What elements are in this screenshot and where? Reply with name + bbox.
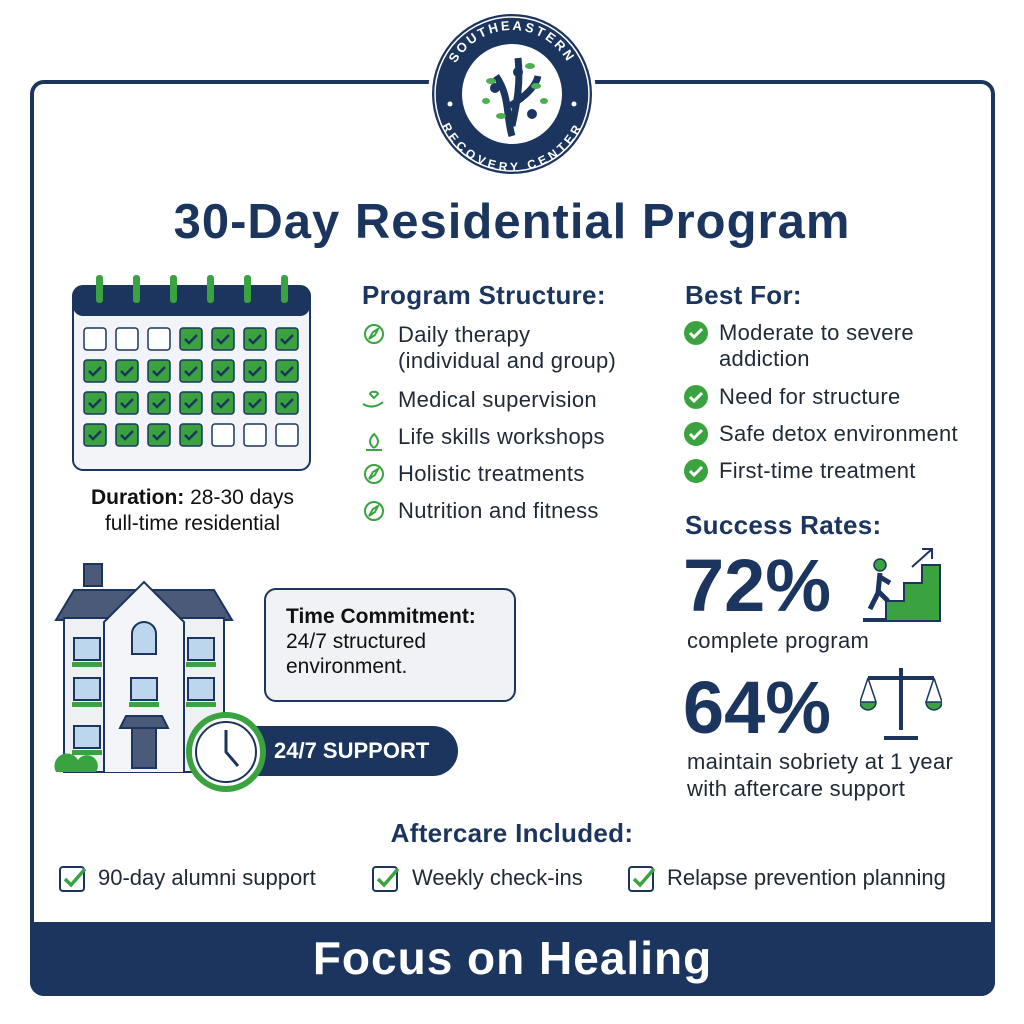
panel: best for [684, 280, 958, 483]
icon: scales [860, 668, 942, 740]
aftercare items: 90-day alumni support [98, 865, 316, 890]
icon: clock [186, 712, 266, 792]
panel: program structure [362, 280, 616, 523]
panel: best for: Need for structure [719, 384, 900, 409]
panel: best for: First-time treatment [719, 458, 916, 483]
callout: time commitment: 24/7 structured [286, 630, 426, 653]
panel: program structure: (individual and group) [398, 348, 616, 373]
panel: success rates: with aftercare support [687, 776, 905, 801]
panel: program structure: Medical supervision [398, 387, 597, 412]
panel: program structure: Program Structure: [362, 280, 606, 310]
duration text: Duration: 28-30 days [91, 486, 294, 509]
callout: time commitment: Time Commitment: [286, 605, 476, 628]
panel: program structure: Life skills workshops [398, 424, 605, 449]
aftercare items [59, 865, 946, 892]
panel: program structure: Daily therapy [398, 322, 530, 347]
badge: 24/7 support [220, 726, 458, 776]
duration text: full-time residential [105, 512, 280, 535]
icon: stairs [863, 548, 941, 622]
panel: best for: Safe detox environment [719, 421, 958, 446]
logo: SOUTHEASTERN [449, 21, 574, 62]
aftercare items: Weekly check-ins [412, 865, 583, 890]
aftercare items: Relapse prevention planning [667, 865, 946, 890]
panel: best for: addiction [719, 346, 810, 371]
badge: 24/7 support: 24/7 SUPPORT [274, 738, 429, 763]
footer banner: Focus on Healing [313, 932, 712, 984]
panel: program structure: Holistic treatments [398, 461, 585, 486]
panel: success rates: 64% [683, 666, 831, 749]
callout: time commitment [264, 588, 516, 702]
callout: time commitment: environment. [286, 655, 407, 678]
duration text [91, 486, 294, 535]
heading: aftercare: Aftercare Included: [391, 818, 633, 848]
panel: success rates: Success Rates: [685, 510, 881, 540]
panel: best for: Best For: [685, 280, 802, 310]
panel: program structure: Nutrition and fitness [398, 498, 599, 523]
icon: calendar [72, 275, 311, 471]
panel: success rates: maintain sobriety at 1 year [687, 749, 953, 774]
logo: RECOVERY CENTER [442, 122, 580, 170]
panel: success rates: 72% [683, 544, 831, 627]
panel: success rates [683, 510, 953, 801]
footer banner [30, 922, 995, 996]
panel: success rates: complete program [687, 628, 869, 653]
title: 30-Day Residential Program [174, 195, 850, 249]
logo [428, 14, 596, 174]
icon: building [54, 563, 234, 773]
panel: best for: Moderate to severe [719, 320, 914, 345]
